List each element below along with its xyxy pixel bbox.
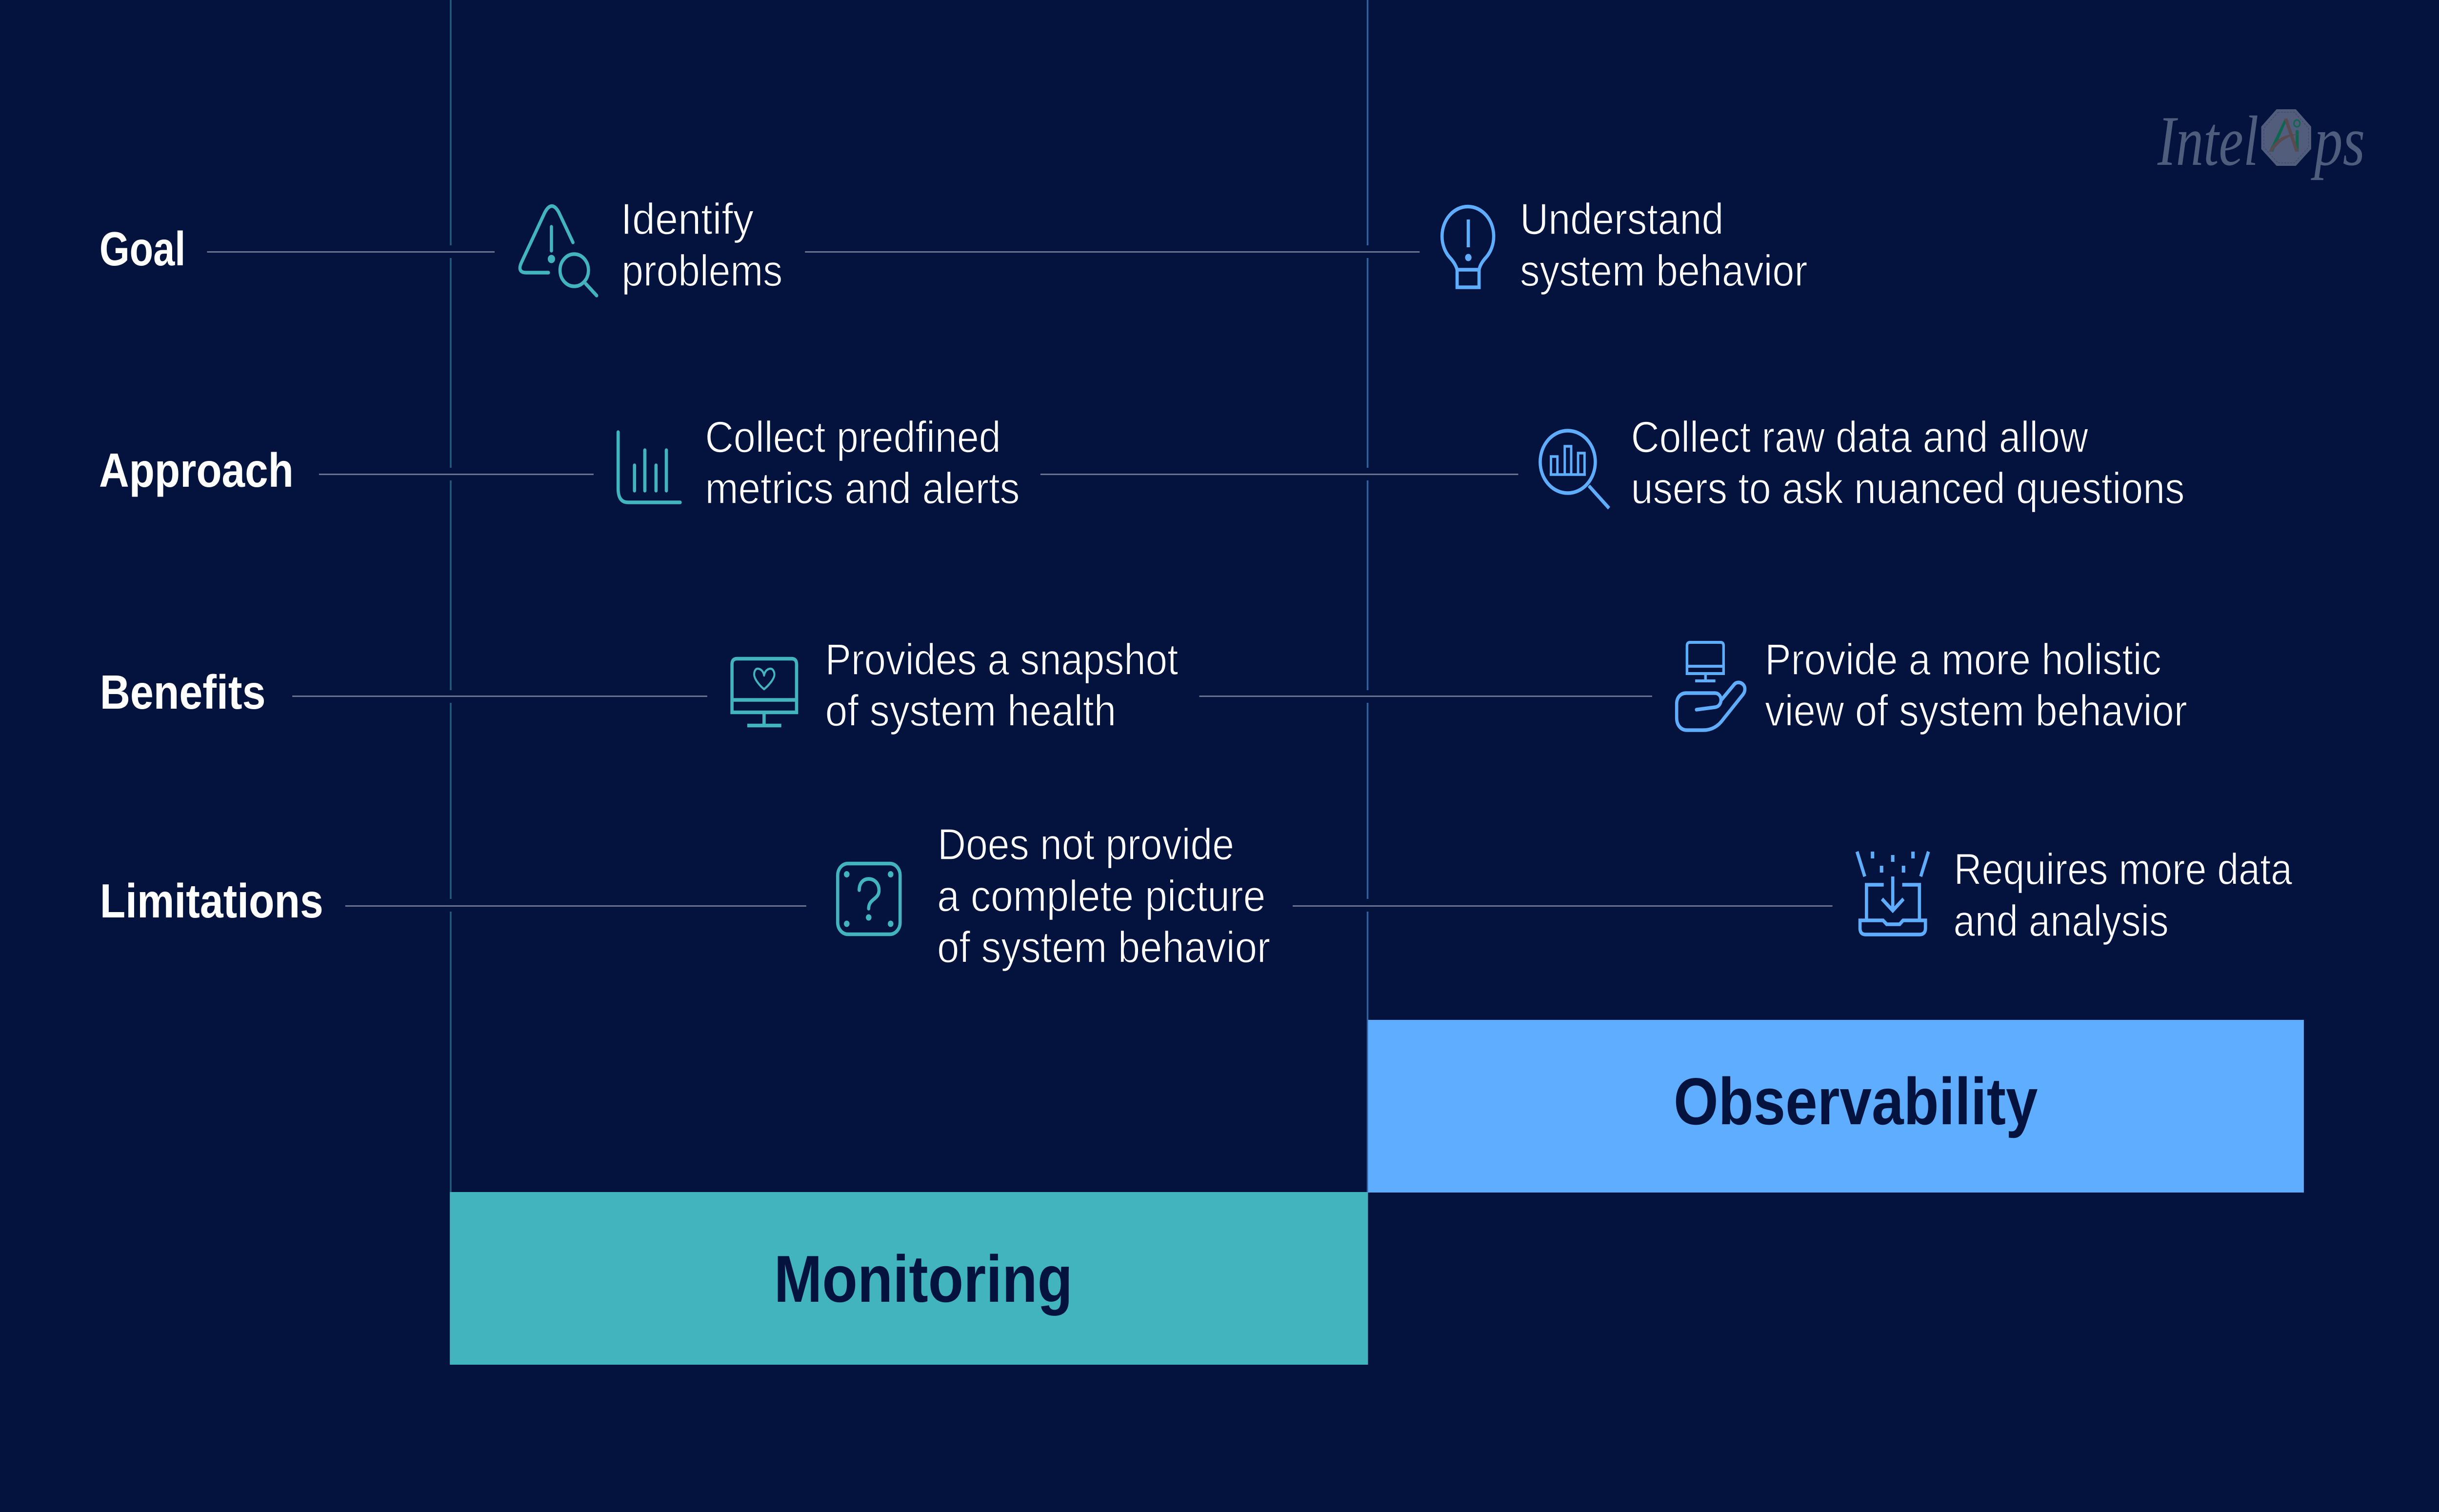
connector: goal to monitoring — [207, 251, 495, 253]
text: observability approach: users to ask nuanced questions — [1631, 463, 2184, 513]
text: monitoring approach: Collect predfined — [705, 412, 1001, 461]
icon: hand holding monitor — [1677, 642, 1745, 730]
panel: observability — [1368, 1020, 2304, 1193]
text: monitoring benefits: Provides a snapshot — [825, 635, 1178, 684]
connector: monitoring to observability limitations — [1293, 905, 1833, 907]
text: monitoring benefits: of system health — [825, 686, 1116, 735]
text: monitoring limitations: Does not provide — [938, 819, 1234, 869]
icon: question mark box — [838, 863, 900, 935]
logo: IntelOps — [2157, 101, 2365, 180]
text: monitoring approach: metrics and alerts — [705, 463, 1020, 513]
connector: monitoring to observability benefits — [1200, 696, 1652, 697]
text: monitoring goal: Identify — [621, 194, 754, 243]
text: monitoring limitations: of system behavior — [937, 922, 1270, 972]
row: goal — [100, 194, 1807, 296]
text: monitoring approach — [705, 412, 1020, 513]
text: observability benefits: view of system behavior — [1765, 686, 2187, 735]
row label: goal: Goal — [100, 222, 185, 276]
vertical axis: monitoring — [450, 0, 452, 1192]
connector: approach to monitoring — [319, 474, 594, 475]
logo: IntelOps: ps — [2310, 101, 2365, 180]
row label: benefits: Benefits — [100, 665, 265, 719]
icon: magnifier with bars — [1540, 431, 1609, 508]
row label: approach: Approach — [99, 443, 294, 497]
row: benefits — [100, 635, 2187, 735]
heading: observability: Observability — [1674, 1065, 2038, 1139]
icon: warning triangle with magnifier — [520, 206, 597, 296]
icon: bar chart — [618, 432, 680, 502]
icon: monitor with heart — [732, 658, 797, 726]
connector: benefits to monitoring — [292, 696, 707, 697]
text: observability limitations: and analysis — [1954, 896, 2169, 945]
connector: limitations to monitoring — [345, 905, 806, 907]
icon: light bulb — [1442, 206, 1494, 287]
text: observability limitations: Requires more data — [1954, 844, 2293, 894]
row: limitations — [100, 819, 2293, 972]
heading: monitoring: Monitoring — [774, 1242, 1073, 1316]
panel: monitoring — [450, 1192, 1368, 1365]
text: monitoring goal: problems — [621, 246, 782, 295]
text: observability benefits: Provide a more holistic — [1765, 635, 2161, 684]
text: observability goal — [1520, 194, 1807, 295]
text: observability benefits — [1765, 635, 2187, 735]
text: observability goal: Understand — [1520, 194, 1723, 243]
text: observability goal: system behavior — [1520, 246, 1807, 295]
text: monitoring benefits — [825, 635, 1178, 735]
connector: monitoring to observability approach — [1040, 474, 1518, 475]
connector: monitoring to observability goal — [805, 251, 1419, 253]
text: observability limitations — [1954, 844, 2293, 945]
text: monitoring goal — [621, 194, 782, 295]
icon: laptop download — [1857, 852, 1928, 935]
text: observability approach — [1631, 412, 2184, 513]
text: monitoring limitations — [937, 819, 1270, 972]
row label: limitations: Limitations — [100, 874, 323, 928]
vertical axis: observability — [1367, 0, 1368, 1192]
row: approach — [99, 412, 2184, 513]
logo: IntelOps: Intel — [2157, 101, 2259, 180]
text: monitoring limitations: a complete picture — [937, 871, 1265, 920]
text: observability approach: Collect raw data and allow — [1631, 412, 2088, 461]
logo badge — [2261, 110, 2311, 165]
